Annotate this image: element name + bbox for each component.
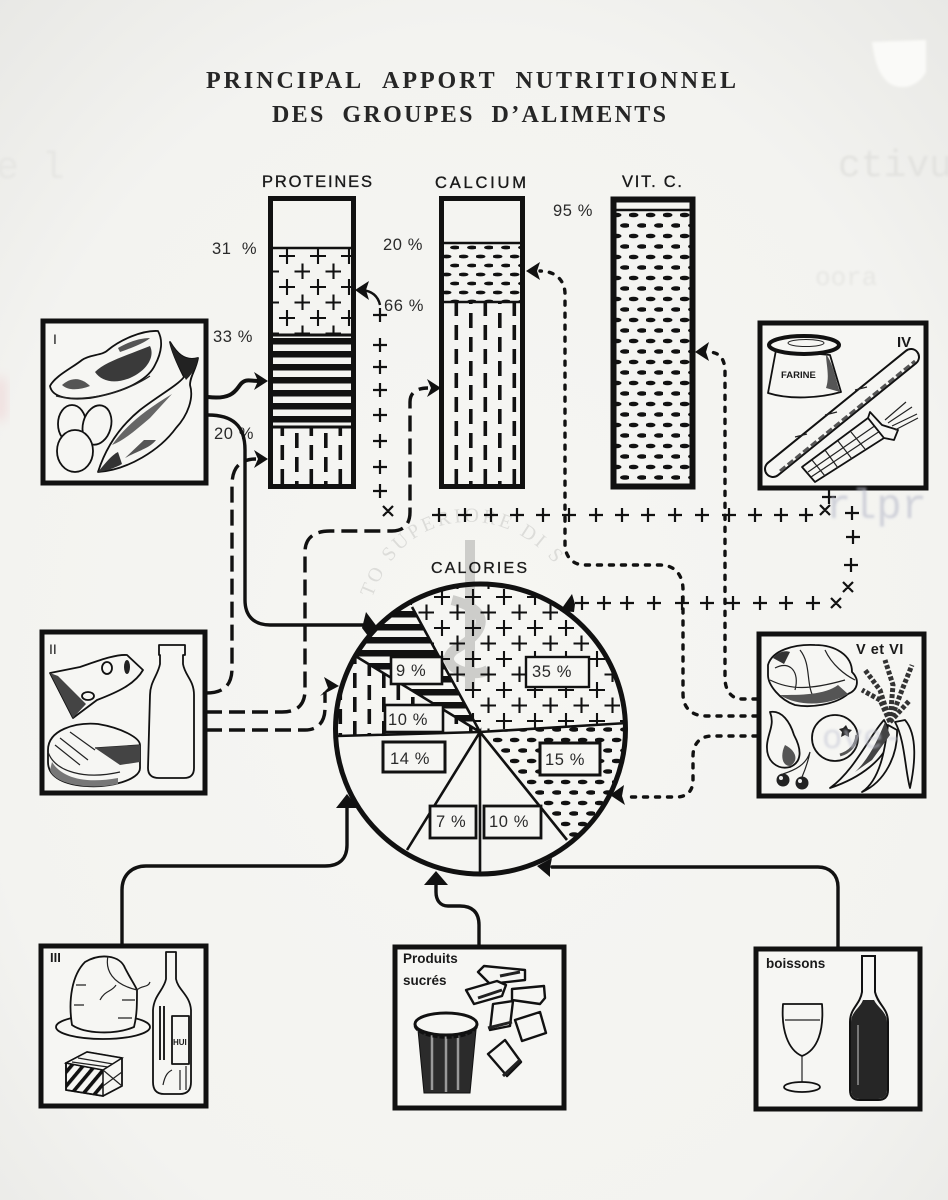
panel caption: sucrés <box>403 973 447 988</box>
value box: 9 % <box>391 657 442 684</box>
value box: 10 % <box>484 806 541 838</box>
ghost print-through text and stains <box>0 40 948 420</box>
pie chart: calories <box>333 562 628 876</box>
value box: 10 %: 10 % <box>388 711 428 729</box>
value: 31 %: 31 % <box>212 240 257 258</box>
group numeral IV: IV <box>897 334 911 351</box>
value box: 9 %: 9 % <box>396 662 426 680</box>
group numeral III: III <box>50 950 61 965</box>
ghost typed overprint: ove- <box>822 721 904 759</box>
icon: baguette <box>773 357 915 471</box>
value box: 35 %: 35 % <box>532 663 572 681</box>
icon: lard on plate <box>56 956 150 1039</box>
panel caption: Produits <box>403 951 458 966</box>
title: DES GROUPES D’ALIMENTS <box>272 102 666 128</box>
value box: 35 % <box>526 657 589 687</box>
icon: sugar cubes <box>466 966 546 1076</box>
icon: jam jar <box>415 1013 477 1093</box>
value: 20 %: 20 % <box>214 425 254 443</box>
bar chart: vitamine C <box>553 173 693 487</box>
stamp watermark <box>360 508 562 689</box>
panel: produits sucres <box>395 947 564 1108</box>
panel: groups V et VI vegetables and fruit <box>759 634 924 796</box>
icon: butter <box>66 1052 122 1096</box>
bottle label: HUI <box>173 1038 187 1047</box>
icon: cherries <box>776 752 810 790</box>
panel: group III fats and oil <box>41 946 206 1106</box>
value box: 15 % <box>540 743 600 775</box>
bar chart: calcium <box>383 174 526 487</box>
arrow: group V et VI to calcium (dotted) <box>526 262 757 716</box>
value: 66 %: 66 % <box>384 297 424 315</box>
icon: wine glass <box>783 1004 822 1092</box>
panel: group II cheese and milk <box>42 632 205 793</box>
arrow: produits sucres to calories <box>424 871 479 945</box>
arrow: group V et VI to vit. C (dotted) <box>695 342 757 699</box>
pie label: CALORIES <box>431 560 527 577</box>
value box: 15 %: 15 % <box>545 751 585 769</box>
bar label: calcium: CALCIUM <box>435 174 526 192</box>
group numeral II: II <box>49 641 57 657</box>
panel: boissons <box>756 949 920 1109</box>
icon: milk bottle <box>148 645 194 778</box>
arrow: group II to calories (dashed) <box>206 677 339 730</box>
value box: 14 %: 14 % <box>390 750 430 768</box>
icon: oil bottle <box>153 952 191 1094</box>
icon: cabbage <box>768 645 857 706</box>
arrow: group I to calories <box>208 415 378 636</box>
icon: flour sack <box>768 336 841 397</box>
icon: round cheese <box>48 724 140 786</box>
icon: carrots <box>830 660 914 792</box>
group numeral V et VI: V et VI <box>856 642 904 658</box>
bar label: proteines: PROTEINES <box>262 173 372 191</box>
title: PRINCIPAL APPORT NUTRITIONNEL <box>206 68 736 94</box>
icon: fish <box>98 342 198 472</box>
arrow: group II to calcium (dashed) <box>206 379 441 712</box>
icon: meat <box>50 331 161 399</box>
arrow: group IV to proteines and calories (plus line) <box>355 281 860 612</box>
ghost print-through text and stains: oora <box>815 263 877 293</box>
ghost typed overprint: rlpr <box>826 483 927 531</box>
value: 95 %: 95 % <box>553 202 593 220</box>
sack label: FARINE <box>781 370 816 381</box>
value box: 14 % <box>383 742 445 772</box>
icon: orange <box>812 715 858 761</box>
arrow: group V et VI to calories (dotted) <box>610 736 757 805</box>
value box: 7 %: 7 % <box>436 813 466 831</box>
bar chart: proteines <box>212 173 372 487</box>
panel: group I meat, eggs, fish <box>43 321 206 483</box>
arrow: group III to calories <box>122 794 358 944</box>
stamp watermark: TO SUPERIORE DI S <box>360 508 562 595</box>
value: 33 %: 33 % <box>213 328 253 346</box>
value: 20 %: 20 % <box>383 236 423 254</box>
value box: 7 % <box>430 806 476 838</box>
value box: 10 %: 10 % <box>489 813 529 831</box>
icon: eggs <box>57 402 116 472</box>
bar label: vit. C: VIT. C. <box>622 173 682 191</box>
icon: pear <box>767 712 800 768</box>
ghost typed overprint <box>822 483 927 759</box>
icon: wine bottle <box>850 956 888 1100</box>
panel caption: boissons <box>766 956 825 971</box>
arrow: group II to proteines (dashed) <box>206 450 268 693</box>
title <box>206 68 736 128</box>
arrow: boissons to calories <box>537 858 838 947</box>
icon: cheese wedge <box>50 655 143 718</box>
panel: group IV flour, bread, pasta <box>760 323 926 488</box>
value box: 10 % <box>385 705 443 732</box>
group numeral I: I <box>53 331 57 347</box>
arrow: group I to proteines <box>208 372 268 398</box>
icon: pasta packet <box>802 402 918 482</box>
